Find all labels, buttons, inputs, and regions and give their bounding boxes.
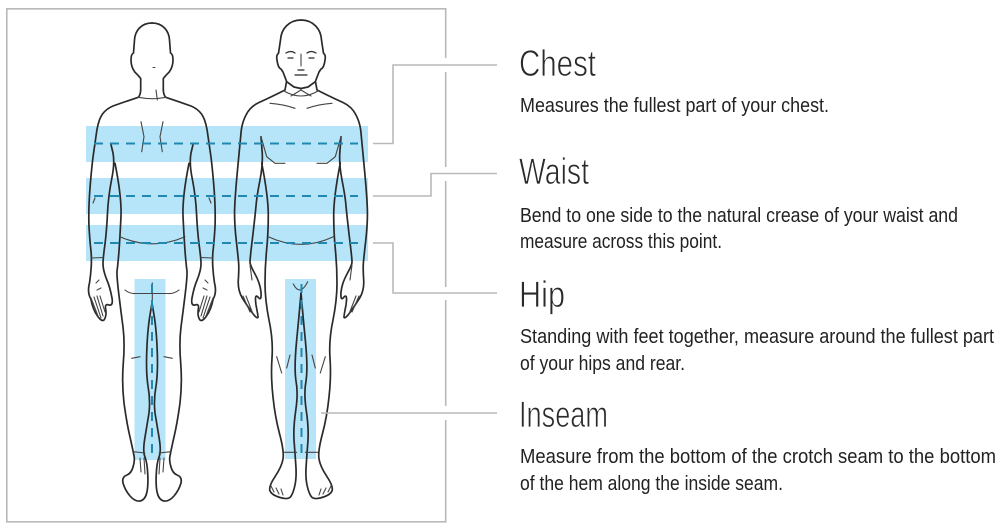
figure: front view	[235, 20, 367, 499]
leader: waist	[373, 174, 497, 196]
heading: waist: Waist	[519, 151, 590, 192]
text: waist description: measure across this point.	[520, 231, 722, 253]
text: waist description: Bend to one side to the natural crease of your waist and	[520, 205, 958, 227]
heading: inseam: Inseam	[519, 394, 608, 435]
text: inseam description: of the hem along the inside seam.	[520, 473, 783, 495]
panel: figure frame	[7, 9, 446, 522]
measurement bands	[86, 126, 368, 460]
heading: hip: Hip	[519, 274, 565, 315]
leader: chest	[373, 65, 497, 144]
section: waist	[519, 151, 958, 253]
section: chest	[519, 43, 829, 117]
section: hip	[519, 274, 994, 375]
heading: chest: Chest	[519, 43, 597, 84]
leader: inseam	[321, 412, 497, 414]
figure: back view	[89, 23, 215, 501]
leader: hip	[373, 243, 497, 293]
measurement dashed lines	[94, 144, 358, 457]
section: inseam	[519, 394, 996, 495]
text: hip description: of your hips and rear.	[520, 353, 685, 375]
text: chest description: Measures the fullest part of your chest.	[520, 95, 829, 117]
